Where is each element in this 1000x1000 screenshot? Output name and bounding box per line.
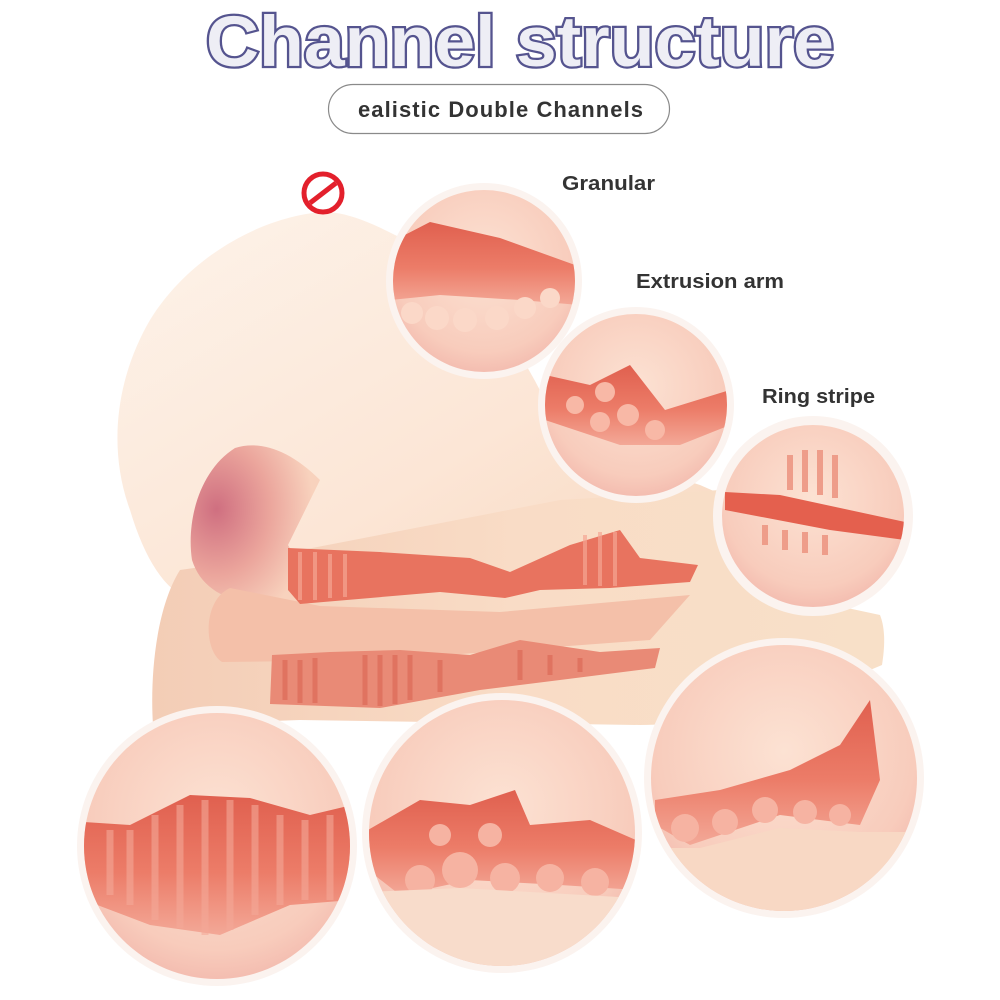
upper lobe xyxy=(191,445,320,605)
upper channel ridges xyxy=(300,532,615,600)
subtitle pill xyxy=(328,84,670,134)
detail circle: granular xyxy=(386,183,582,379)
detail circle: lower middle xyxy=(362,693,642,973)
subtitle pill: ealistic Double Channels xyxy=(358,97,643,122)
detail circle: ring stripe xyxy=(713,416,913,616)
product body xyxy=(117,212,884,725)
lower body xyxy=(152,490,884,725)
label: Extrusion arm: Extrusion arm xyxy=(636,271,784,293)
detail circle: lower right xyxy=(644,638,924,918)
icon: prohibited sign xyxy=(304,174,342,212)
title: Channel structure xyxy=(206,3,834,82)
upper channel xyxy=(288,530,698,604)
middle lobe xyxy=(209,588,690,662)
lower channel xyxy=(270,640,660,708)
detail circle: extrusion arm xyxy=(538,307,734,503)
detail circle: lower left xyxy=(77,706,357,986)
lower channel ridges xyxy=(285,650,580,706)
label: Ring stripe: Ring stripe xyxy=(762,386,875,408)
upper body xyxy=(117,212,780,620)
label: Granular: Granular xyxy=(562,173,655,195)
